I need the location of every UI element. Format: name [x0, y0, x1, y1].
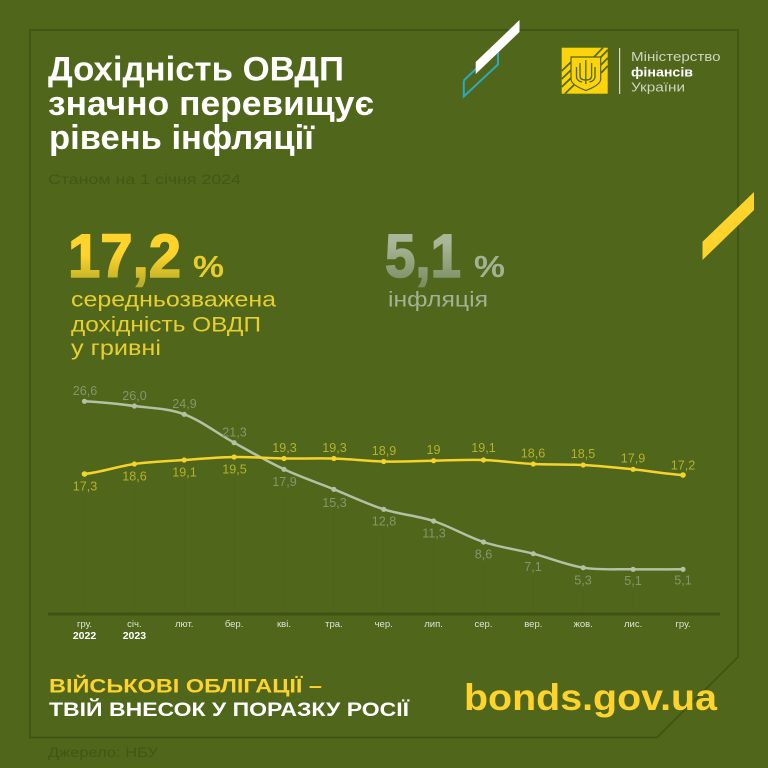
inflation value labels: 21,3	[222, 426, 247, 440]
month axis labels: січ.	[127, 619, 142, 630]
inflation line	[82, 399, 686, 572]
yield value labels	[73, 441, 695, 494]
line chart	[48, 384, 720, 642]
stat label: bond yield: дохідність ОВДП	[71, 312, 261, 336]
yield value labels: 19,3	[322, 441, 347, 455]
website: bonds.gov.ua	[464, 677, 717, 718]
inflation value labels: 12,8	[372, 515, 396, 529]
month axis labels: тра.	[325, 619, 343, 630]
month axis labels: 2022	[73, 630, 96, 642]
inflation value labels: 5,3	[574, 573, 592, 587]
month axis labels: жов.	[574, 619, 593, 630]
title: значно перевищує	[48, 85, 374, 123]
title	[48, 50, 374, 157]
stat: bond yield: 17,2	[68, 222, 181, 290]
month axis labels: чер.	[375, 619, 393, 630]
month axis labels: гру.	[675, 619, 691, 630]
slogan: ВІЙСЬКОВІ ОБЛІГАЦІЇ –	[49, 674, 322, 698]
yield value labels: 19	[426, 443, 441, 457]
yield value labels: 17,3	[73, 480, 97, 494]
yield value labels: 18,5	[571, 447, 595, 461]
yield value labels: 19,3	[272, 441, 297, 455]
logo emblem	[562, 48, 608, 94]
yield value labels: 19,5	[222, 462, 247, 476]
month axis labels: гру.	[77, 619, 92, 630]
inflation value labels: 5,1	[674, 574, 692, 588]
yield value labels: 18,6	[122, 470, 147, 484]
ribbon: yellow	[702, 192, 754, 260]
yield value labels: 19,1	[471, 441, 496, 455]
inflation value labels: 7,1	[524, 560, 542, 574]
stat: bond yield: %	[193, 249, 224, 284]
month axis labels: 2023	[123, 630, 146, 642]
logo text: Міністерство	[631, 49, 720, 64]
ribbon: white and blue	[464, 20, 520, 96]
month axis labels: лют.	[175, 619, 193, 630]
month axis labels: бер.	[225, 619, 243, 630]
yield value labels: 17,9	[621, 452, 645, 466]
stat label: bond yield	[71, 288, 276, 360]
logo text: України	[631, 80, 685, 94]
month axis labels: вер.	[524, 619, 542, 630]
logo text: фінансів	[631, 64, 693, 80]
stat label: bond yield: у гривні	[71, 336, 161, 360]
yield line	[82, 454, 686, 478]
yield value labels: 19,1	[172, 466, 197, 480]
inflation value labels: 26,0	[122, 389, 147, 403]
stat: inflation: інфляція	[388, 288, 488, 312]
slogan	[49, 674, 410, 721]
month axis labels: лис.	[624, 619, 642, 630]
stat: bond yield	[68, 222, 276, 360]
title: Дохідність ОВДП	[48, 50, 344, 88]
yield value labels: 17,2	[671, 458, 695, 472]
stat label: bond yield: середньозважена	[71, 288, 276, 312]
inflation value labels: 24,9	[172, 397, 197, 411]
month axis labels: сер.	[475, 619, 492, 630]
inflation value labels: 26,6	[73, 384, 97, 398]
stat: inflation: %	[474, 249, 505, 284]
inflation value labels: 11,3	[422, 527, 446, 541]
logo: ministry of finance	[562, 48, 720, 94]
month axis labels	[73, 619, 691, 642]
inflation value labels: 15,3	[322, 496, 347, 510]
stat: inflation: 5,1	[385, 222, 461, 290]
month axis labels: кві.	[277, 619, 291, 630]
month axis labels: лип.	[424, 619, 443, 630]
stat: inflation	[385, 222, 505, 312]
logo text	[631, 49, 720, 94]
inflation value labels	[73, 384, 692, 588]
source: Джерело: НБУ	[48, 745, 159, 760]
inflation value labels: 8,6	[475, 548, 492, 562]
inflation value labels: 5,1	[624, 574, 642, 588]
subtitle: date: Станом на 1 січня 2024	[48, 172, 242, 187]
yield value labels: 18,9	[372, 444, 396, 458]
yield value labels: 18,6	[521, 447, 545, 461]
slogan: ТВІЙ ВНЕСОК У ПОРАЗКУ РОСІЇ	[49, 697, 410, 721]
title: рівень інфляції	[49, 119, 315, 157]
inflation value labels: 17,9	[272, 475, 297, 489]
